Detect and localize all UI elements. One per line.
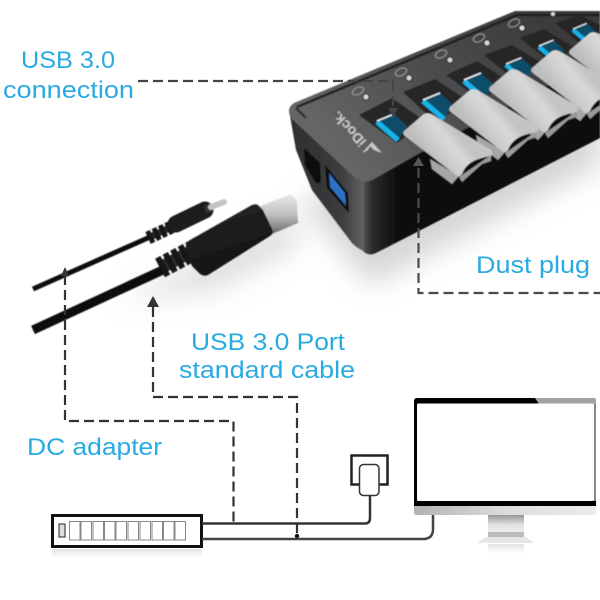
hub body front <box>360 58 600 254</box>
USB icons <box>351 17 521 97</box>
hub body side <box>289 110 364 251</box>
hub schematic icon <box>52 516 202 558</box>
hub device <box>289 11 600 254</box>
wall socket icon <box>352 456 388 496</box>
monitor reflection <box>488 544 524 554</box>
dashed leader: dust plug <box>413 157 600 293</box>
monitor screen <box>417 404 594 501</box>
hub top face <box>289 11 600 182</box>
label: USB 3.0 port standard cable <box>179 329 355 384</box>
iDock brand label: iDock. <box>329 108 369 150</box>
status LEDs <box>363 12 556 100</box>
USB port recesses <box>359 15 600 143</box>
USB-B strain relief <box>160 248 198 268</box>
label: USB 3.0 port standard cable: USB 3.0 Port <box>191 329 345 356</box>
soft shadow: hub and cables <box>120 110 600 300</box>
logo mark <box>362 142 382 153</box>
DC strain relief ridges <box>150 225 176 237</box>
dust plugs <box>403 32 600 184</box>
DC power cable <box>33 202 224 289</box>
monitor frame <box>414 398 596 506</box>
monitor icon <box>414 398 596 554</box>
label: USB 3.0 connection: connection <box>3 77 134 104</box>
monitor stand <box>488 515 524 533</box>
USB-B cable <box>33 194 298 330</box>
label: DC adapter: DC adapter <box>27 434 162 461</box>
label: USB 3.0 connection: USB 3.0 <box>21 47 115 74</box>
dashed leader: USB 3.0 connection <box>138 81 398 117</box>
label: USB 3.0 connection <box>3 47 134 104</box>
USB-B metal tip <box>258 194 298 234</box>
monitor chin <box>414 506 596 515</box>
blue USB ports <box>377 23 597 140</box>
USB-B connector body <box>186 204 273 276</box>
power wire <box>202 495 370 524</box>
monitor wire <box>202 514 433 539</box>
label: dust plug: Dust plug <box>476 252 590 279</box>
dashed leader: DC adapter <box>61 267 234 522</box>
junction dot <box>295 534 299 538</box>
dashed leader: USB cable <box>147 296 297 536</box>
USB-B socket <box>325 165 349 213</box>
label: USB 3.0 port standard cable: standard cable <box>179 357 355 384</box>
DC jack socket <box>304 148 321 183</box>
hub reflection <box>52 549 202 558</box>
